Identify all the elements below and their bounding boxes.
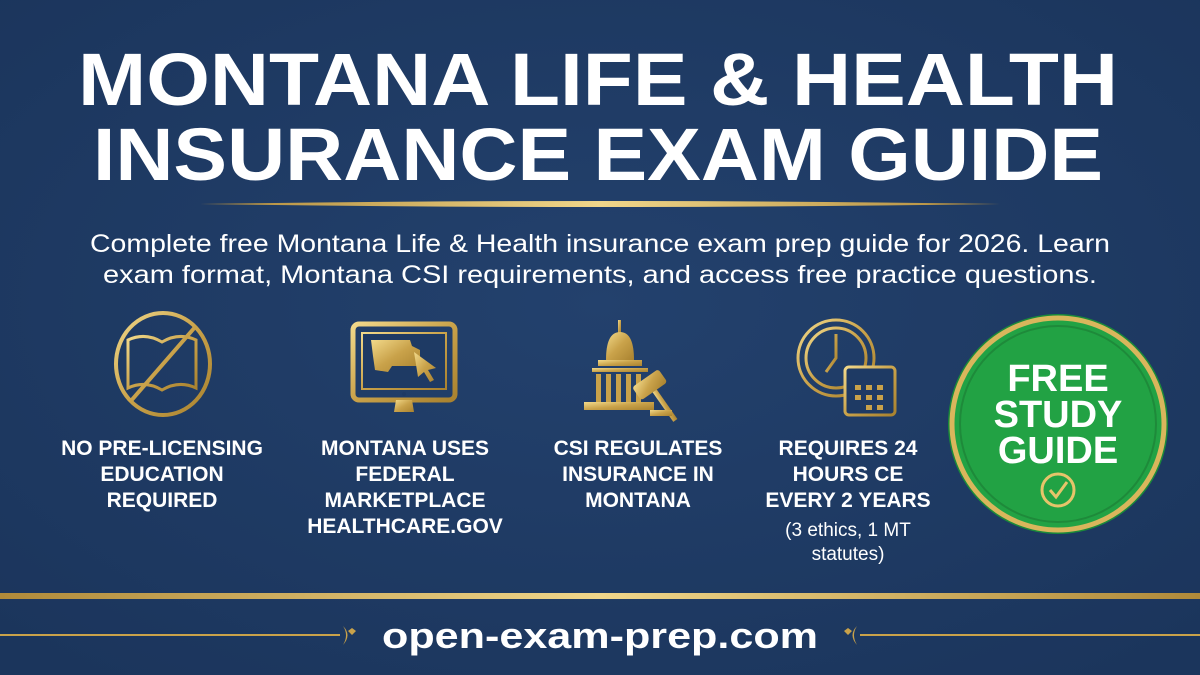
labels: MONTANA: [585, 489, 691, 512]
footer url: [0, 615, 1200, 656]
labels: EDUCATION: [100, 463, 224, 486]
icon: monitor: [353, 324, 455, 412]
badge: free study guide: [948, 314, 1168, 534]
labels: MONTANA USES: [321, 437, 489, 460]
footer url: open-exam-prep.com: [382, 615, 818, 656]
labels: [61, 437, 931, 565]
labels: FEDERAL: [355, 463, 455, 486]
subtitle: [90, 230, 1110, 289]
icon: capitol and gavel: [584, 320, 688, 430]
title: MONTANA LIFE & HEALTH: [78, 38, 1118, 121]
badge: free study guide: GUIDE: [998, 430, 1118, 472]
labels: INSURANCE IN: [562, 463, 714, 486]
icon: no book: [116, 313, 210, 415]
subtitle: Complete free Montana Life & Health insurance exam prep guide for 2026. Learn: [90, 230, 1110, 258]
title: INSURANCE EXAM GUIDE: [93, 113, 1103, 196]
labels: EVERY 2 YEARS: [765, 489, 931, 512]
divider: [200, 201, 1000, 207]
gold rule: [0, 593, 1200, 599]
labels: HEALTHCARE.GOV: [307, 515, 503, 538]
labels: CSI REGULATES: [554, 437, 722, 460]
labels: REQUIRES 24: [779, 437, 918, 460]
labels: NO PRE-LICENSING: [61, 437, 263, 460]
labels: REQUIRED: [107, 489, 217, 512]
icon: clock calendar: [798, 320, 895, 415]
badge: free study guide: FREE: [1007, 358, 1109, 400]
labels: statutes): [812, 544, 884, 565]
badge: free study guide: STUDY: [994, 394, 1122, 436]
title: [78, 38, 1118, 196]
labels: (3 ethics, 1 MT: [785, 520, 911, 541]
labels: HOURS CE: [793, 463, 903, 486]
subtitle: exam format, Montana CSI requirements, and access free practice questions.: [103, 261, 1097, 289]
labels: MARKETPLACE: [324, 489, 486, 512]
